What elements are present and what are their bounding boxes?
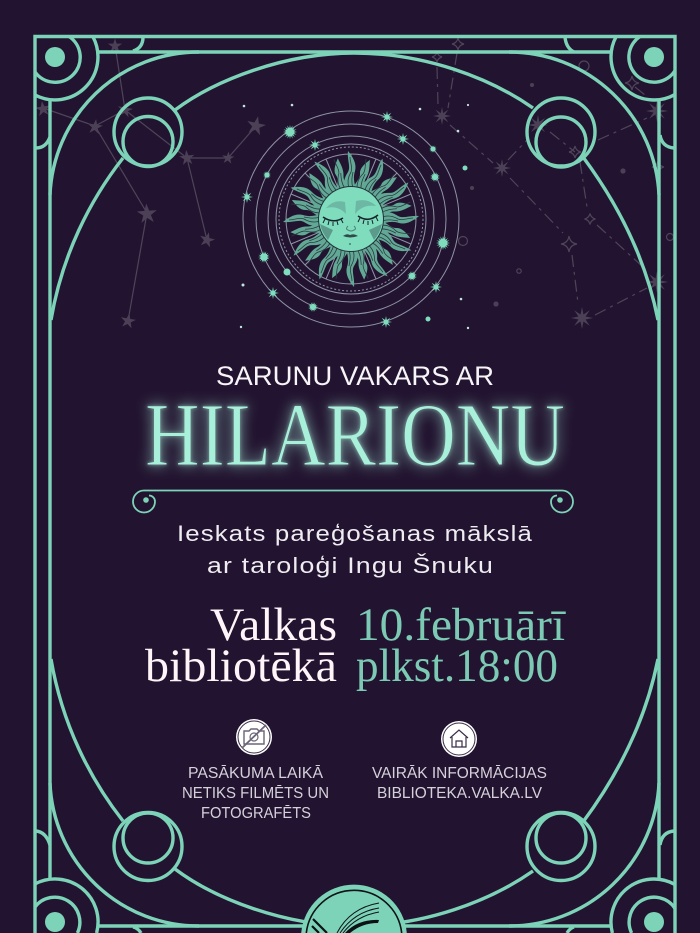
date and time: plkst.18:00: [356, 640, 558, 692]
venue: [145, 599, 337, 692]
description: [177, 521, 533, 578]
sun emblem: [240, 104, 469, 329]
subtitle: SARUNU VAKARS AR: [216, 361, 494, 391]
note: no filming: [182, 764, 329, 822]
note: no filming: FOTOGRAFĒTS: [201, 804, 311, 822]
venue: Valkas: [210, 599, 337, 651]
icon: house: [441, 721, 477, 757]
stars around sun: [240, 104, 469, 329]
venue: bibliotēkā: [145, 640, 337, 692]
library logo: [301, 885, 407, 933]
description: ar taroloģi Ingu Šnuku: [207, 553, 494, 578]
note: no filming: NETIKS FILMĒTS UN: [182, 784, 329, 802]
note: more information: [372, 764, 547, 802]
icon: no camera: [236, 719, 272, 755]
description: Ieskats pareģošanas mākslā: [177, 521, 533, 546]
sun face: [318, 186, 384, 252]
sun rays: [283, 151, 419, 287]
date and time: [356, 599, 566, 692]
moon rings: [114, 98, 595, 880]
orbit rings: [243, 111, 459, 327]
note: no filming: PASĀKUMA LAIKĀ: [188, 764, 323, 782]
note: more information: VAIRĀK INFORMĀCIJAS: [372, 764, 547, 782]
scroll divider: [133, 490, 573, 512]
note: more information: BIBLIOTEKA.VALKA.LV: [377, 785, 542, 802]
right constellation: [432, 38, 674, 329]
main title: HILARIONU: [145, 386, 565, 485]
date and time: 10.februārī: [356, 599, 566, 651]
left constellation: [34, 38, 267, 329]
